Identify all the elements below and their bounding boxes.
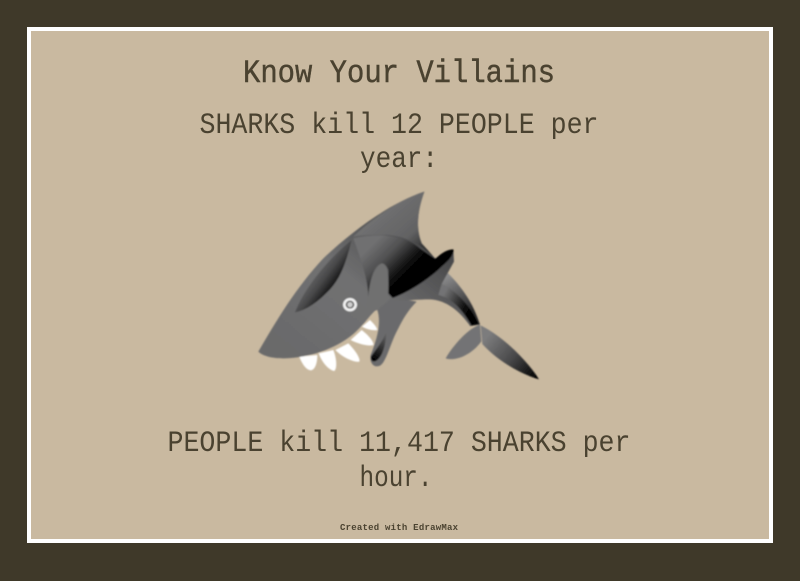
statement: people kill sharks: PEOPLE kill 11,417 SHARKS per xyxy=(168,427,630,461)
shark tail stalk xyxy=(440,273,480,326)
shark shoulder shading xyxy=(353,235,453,298)
statement: people kill sharks xyxy=(168,427,630,496)
statement: sharks kill people: year: xyxy=(360,143,438,177)
shark body and dorsal fin xyxy=(258,192,479,358)
statement: sharks kill people xyxy=(200,109,598,177)
shark teeth xyxy=(299,320,377,371)
shark rear black tip xyxy=(435,249,453,265)
shark tail lower lobe xyxy=(446,325,481,359)
shark front fin fold xyxy=(368,263,391,311)
shark tail upper lobe xyxy=(481,325,539,379)
shark lower body stalk highlight xyxy=(438,284,479,325)
statement: people kill sharks: hour. xyxy=(360,462,432,496)
statement: sharks kill people: SHARKS kill 12 PEOPLE per xyxy=(200,109,598,143)
shark eye xyxy=(343,298,357,311)
shark dorsal fin shading xyxy=(353,192,435,258)
shark lower flipper xyxy=(370,297,417,366)
shark gill slit xyxy=(295,240,352,312)
shark flipper shadow xyxy=(371,330,387,361)
title: Know Your Villains xyxy=(243,55,555,92)
icon: shark illustration xyxy=(258,192,539,379)
footer credit: Created with EdrawMax xyxy=(340,523,459,533)
